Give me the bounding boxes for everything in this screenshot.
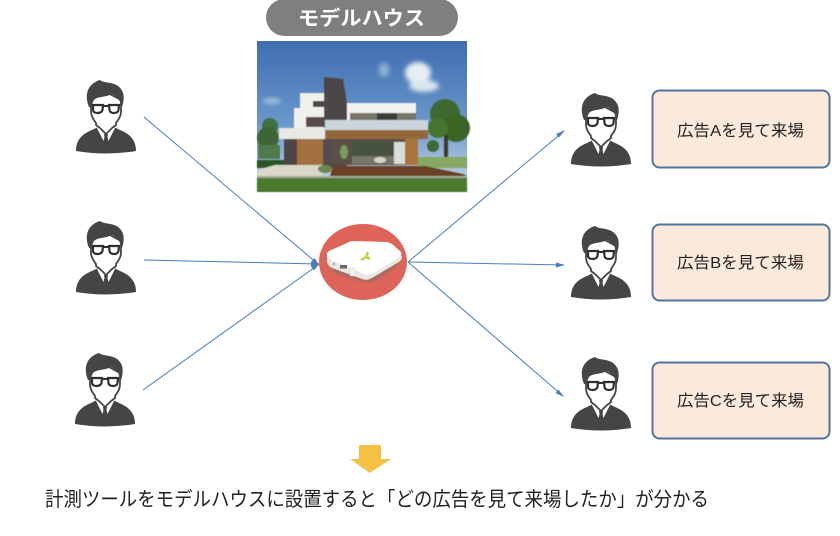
- person: left top: [76, 80, 136, 154]
- arrow: left middle to device: [144, 260, 320, 267]
- label: 広告C: 広告Cを見て来場: [677, 392, 804, 410]
- person: right bottom: [571, 357, 631, 430]
- arrow: left bottom to device: [143, 263, 320, 390]
- conclusion text: 計測ツールをモデルハウスに設置すると「どの広告を見て来場したか」が分かる: [45, 488, 709, 511]
- person: left middle: [76, 221, 136, 294]
- box: 広告A: [652, 90, 830, 168]
- title text: モデルハウス: [298, 6, 425, 30]
- title pill: モデルハウス: [266, 0, 458, 36]
- label: 広告B: 広告Bを見て来場: [677, 254, 804, 272]
- person: right middle: [571, 226, 631, 300]
- icon: measuring device in red circle: [319, 224, 407, 300]
- arrow: left top to device: [144, 117, 320, 266]
- person: left bottom: [75, 353, 135, 426]
- photo: model house: [257, 41, 470, 192]
- box: 広告B: [652, 224, 830, 300]
- arrow: device to right top: [408, 130, 565, 262]
- arrow: yellow down arrow: [350, 445, 391, 473]
- label: 広告A: 広告Aを見て来場: [677, 122, 804, 140]
- box: 広告C: [652, 362, 830, 438]
- person: right top: [571, 93, 631, 166]
- arrow: device to right middle: [408, 262, 565, 268]
- arrow: device to right bottom: [408, 262, 564, 397]
